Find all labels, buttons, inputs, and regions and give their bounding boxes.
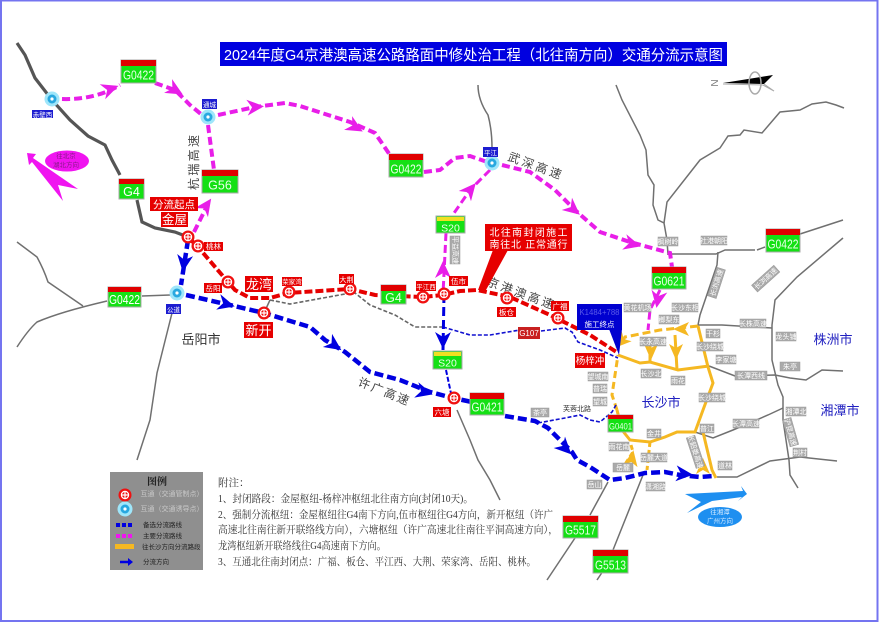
gray place labels: 黄花机场 — [624, 303, 652, 312]
gray place labels: 岳山 — [588, 480, 602, 489]
legend item: diversion direction: 分流方向 — [143, 557, 169, 566]
gray place labels: 沪昆高速 — [782, 417, 799, 447]
notes: 3、互通北往南封闭点：广福、板仓、平江西、大荆、荣家湾、岳阳、桃林。 — [218, 555, 536, 568]
arrow: toward Xiangtan / Guangzhou — [685, 486, 747, 527]
gray place labels: 长沙绕城 — [696, 342, 724, 351]
gray place labels: 长浏高速 — [708, 268, 725, 298]
thin blue local routes — [443, 327, 618, 423]
arrow: toward Xiangtan / Guangzhou: 往湘潭 — [710, 507, 730, 516]
red node labels: 金屋 — [162, 212, 187, 227]
gray place labels: 普瑞 — [593, 384, 607, 393]
compass — [710, 72, 774, 94]
blue alternate diversion route — [181, 240, 714, 480]
gray place labels: 长潭高速 — [732, 419, 760, 428]
route shields: G0422 — [768, 238, 799, 252]
gray place labels: 长潭西线 — [737, 371, 765, 380]
route shields: G56 — [208, 178, 232, 192]
arrow: toward Beijing / Hubei — [27, 150, 89, 201]
compass: N — [710, 79, 721, 87]
callout: construction end point: K1484+788 — [580, 307, 620, 317]
gray place labels: 李家塘 — [716, 355, 736, 364]
gray place labels: 长株高速 — [739, 319, 767, 328]
gray place labels: 荆村 — [793, 448, 807, 457]
yellow arrows — [610, 322, 710, 474]
city names: 长沙市 — [641, 395, 681, 410]
red node labels: 广福 — [552, 301, 568, 311]
city names: 株洲市 — [813, 332, 853, 347]
pink arrows — [100, 78, 667, 309]
red node labels: 桃林 — [206, 241, 221, 251]
road: G4 thick gray — [17, 43, 188, 237]
red node labels: 杨梓冲 — [576, 355, 604, 367]
pink main diversion route — [62, 83, 672, 330]
gray place labels: 平益高速 — [451, 236, 460, 264]
gray place labels: 枫树岭 — [658, 237, 678, 246]
gray place labels: 长沙绕城 — [698, 393, 726, 402]
route shields: S20 — [438, 358, 457, 370]
red node labels: 岳阳 — [206, 283, 220, 293]
callout: closed north to south: 北往南封闭施工 — [490, 226, 568, 239]
interchange nodes: traffic guidance — [44, 92, 500, 300]
road names: 杭瑞高速 — [186, 135, 201, 190]
gray place labels — [450, 236, 807, 491]
callout: closed north to south: 南往北 正常通行 — [490, 238, 568, 251]
gray place labels: 长韶娄高速 — [686, 434, 705, 470]
blue node labels: 公道 — [167, 305, 180, 314]
red node labels: 伍市 — [451, 276, 466, 286]
legend item: alternate route: 备选分流路线 — [143, 520, 182, 529]
blue node labels: 通城 — [203, 100, 216, 109]
gray place labels: 普江 — [700, 424, 714, 433]
notes: 高速北往南往新开联络线方向），六塘枢纽（许广高速北往南往平洞高速方向）， — [218, 523, 558, 536]
legend item: guidance interchange: 互通（交通诱导点） — [140, 504, 204, 513]
callout: construction end point: 施工终点 — [584, 319, 615, 329]
yellow Changsha diversion routes — [612, 326, 716, 478]
gray place labels: 雨花 — [671, 376, 685, 385]
interchange nodes: traffic control — [182, 230, 564, 404]
gray place labels: 望城南 — [588, 372, 608, 381]
route shields: G0422 — [390, 162, 422, 176]
road: closed section red — [188, 237, 618, 353]
legend item: main route: 主要分流路线 — [143, 531, 182, 540]
red node labels: 六塘 — [434, 407, 450, 417]
gray place labels: 潇湘路 — [645, 482, 666, 491]
gray dashed connector — [270, 293, 445, 327]
callout: construction end point — [577, 304, 622, 355]
gray place labels: 芙蓉北路 — [563, 404, 591, 413]
gray place labels: 金井 — [647, 429, 661, 438]
gray place labels: 长沙北 — [640, 369, 662, 378]
route shields: G4 — [123, 185, 140, 199]
red node labels: 龙湾 — [246, 277, 272, 292]
red node labels: G107 — [519, 329, 539, 338]
gray place labels: 雨花南 — [608, 442, 630, 451]
blue arrows — [175, 254, 694, 483]
red node labels: 荣家湾 — [282, 277, 302, 286]
legend: 图例 — [147, 475, 167, 488]
gray place labels: 社港朝阳 — [700, 236, 728, 245]
route shields: G0621 — [654, 274, 685, 288]
gray place labels: 榔梨东 — [658, 315, 680, 324]
callout: closed north to south — [478, 224, 572, 290]
gray place labels: 岳麓 — [616, 463, 630, 472]
route shields: G0401 — [609, 422, 632, 432]
gray place labels: 龙头铺 — [776, 332, 796, 341]
city names: 岳阳市 — [181, 332, 221, 347]
title — [220, 42, 727, 66]
blue node labels: 赤壁西 — [33, 110, 53, 119]
notes: 附注： — [218, 476, 250, 489]
gray place labels: 朱亭 — [783, 362, 797, 371]
route shields: G0422 — [109, 293, 140, 307]
gray place labels: 长永高速 — [639, 337, 667, 346]
route shields: G0421 — [472, 400, 503, 414]
route shields: G5517 — [565, 524, 596, 538]
red node labels: 大荆 — [340, 275, 354, 284]
arrow: toward Xiangtan / Guangzhou: 广州方向 — [707, 516, 733, 525]
route shields: G0422 — [123, 68, 154, 82]
city names — [181, 332, 860, 418]
notes: 1、封闭路段：金屋枢纽-杨梓冲枢纽北往南方向(封闭10天)。 — [218, 492, 473, 505]
road names: 京港澳高速 — [485, 274, 556, 312]
notes: 龙湾枢纽新开联络线往G4高速南下方向。 — [218, 539, 386, 552]
gray place labels: 茶亭 — [533, 408, 547, 417]
legend item: control interchange: 互通（交通管制点） — [140, 489, 204, 498]
notes: 2、强制分流枢纽：金屋枢纽往G4南下方向,伍市枢纽往G4方向，新开枢纽（许广 — [218, 508, 553, 521]
route shields: G4 — [385, 291, 402, 305]
red node labels: 平江西 — [416, 283, 436, 291]
route shields — [108, 60, 800, 573]
red node labels: 新开 — [245, 323, 272, 338]
arrow: toward Beijing / Hubei: 湖北方向 — [53, 160, 79, 169]
route shields: G5513 — [595, 558, 626, 572]
city names: 湘潭市 — [820, 403, 860, 418]
gray place labels: 望城 — [593, 397, 607, 406]
gray place labels: 岳麓大道 — [640, 453, 668, 462]
route shields: S20 — [441, 222, 460, 234]
gray place labels: 干杉 — [706, 329, 720, 338]
blue node labels — [32, 99, 498, 314]
legend — [110, 472, 204, 570]
notes — [218, 476, 558, 568]
legend item: Changsha route: 往长沙方向分流路段 — [142, 542, 201, 551]
gray place labels: 道林 — [718, 461, 732, 470]
road names — [186, 135, 564, 408]
gray background roads — [17, 85, 844, 580]
gray place labels: 长浏高速 — [752, 266, 779, 291]
arrow: toward Beijing / Hubei: 往北京 — [56, 151, 76, 160]
title: 2024年度G4京港澳高速公路路面中修处治工程（北往南方向）交通分流示意图 — [224, 46, 723, 64]
red node labels: 板仓 — [499, 307, 514, 317]
red node labels — [150, 197, 605, 417]
blue node labels: 平江 — [484, 149, 498, 157]
gray place labels: 湘潭北 — [786, 407, 806, 416]
gray place labels: 长沙东枢 — [671, 303, 699, 312]
road names: 许广高速 — [356, 374, 412, 408]
road names: 武深高速 — [506, 149, 564, 182]
red node labels: 分流起点 — [153, 198, 195, 211]
